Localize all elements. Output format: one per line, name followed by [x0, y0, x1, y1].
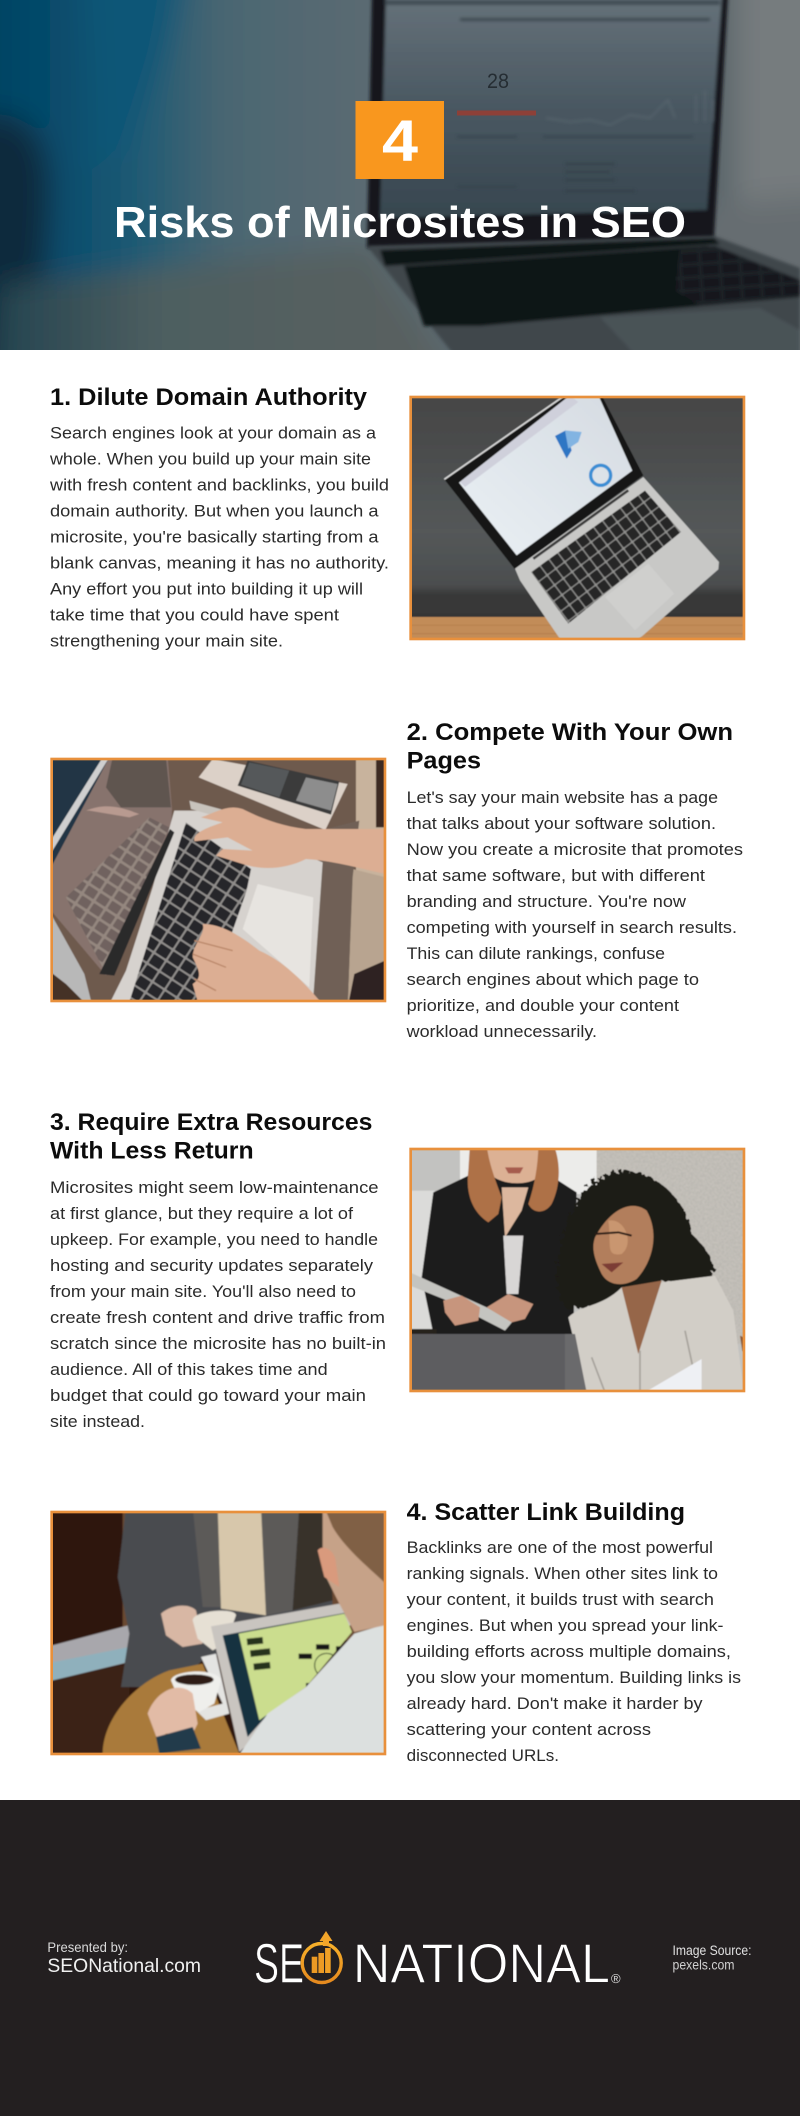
- image source: Image Source:: [672, 1943, 752, 1958]
- body text 1: blank canvas, meaning it has no authority.: [50, 553, 389, 572]
- body text 2: workload unnecessarily.: [406, 1022, 597, 1041]
- section 2: compete with your own pages: [44, 719, 743, 1041]
- logo: SEO National: NATIONAL: [353, 1932, 610, 1994]
- body text 1: Any effort you put into building it up will: [50, 579, 363, 598]
- body text 2: prioritize, and double your content: [407, 996, 679, 1015]
- title: Risks of Microsites in SEO: [114, 198, 686, 247]
- body text 2: Now you create a microsite that promotes: [407, 840, 743, 859]
- hero laptop lid and screen: [367, 0, 728, 248]
- body text 3: from your main site. You'll also need to: [50, 1282, 356, 1301]
- heading 4: 4. Scatter Link Building: [407, 1499, 685, 1526]
- footer band: [0, 1800, 800, 2116]
- body text 2: [406, 788, 743, 1041]
- presented by: SEONational.com: [47, 1955, 201, 1977]
- section 3: require extra resources: [50, 1109, 752, 1431]
- section 4: scatter link building: [46, 1499, 741, 1765]
- hero banner: [0, 0, 800, 350]
- body text 1: whole. When you build up your main site: [49, 449, 371, 468]
- body text 4: already hard. Don't make it harder by: [407, 1694, 703, 1713]
- hero laptop screen details: 28: [487, 70, 509, 93]
- body text 2: branding and structure. You're now: [407, 892, 687, 911]
- logo icon: orange ring with bars and arrow: [302, 1931, 341, 1982]
- heading 3: 3. Require Extra Resources: [50, 1109, 372, 1136]
- body text 3: scratch since the microsite has no built-in: [50, 1334, 386, 1353]
- presented by: [47, 1939, 201, 1977]
- body text 4: building efforts across multiple domains,: [407, 1642, 731, 1661]
- body text 4: your content, it builds trust with search: [407, 1590, 714, 1609]
- body text 2: search engines about which page to: [407, 970, 699, 989]
- body text 1: take time that you could have spent: [50, 605, 339, 624]
- logo: SEO National: SE: [254, 1932, 304, 1994]
- body text 4: Backlinks are one of the most powerful: [407, 1538, 713, 1557]
- presented by: Presented by:: [47, 1939, 128, 1955]
- number badge: 4: [382, 108, 418, 174]
- heading 3: With Less Return: [50, 1138, 254, 1164]
- photo: laptop on dark table: [405, 392, 752, 647]
- heading 2: [407, 719, 733, 774]
- body text 3: site instead.: [50, 1412, 145, 1431]
- heading 3: [50, 1109, 372, 1164]
- body text 4: ranking signals. When other sites link to: [407, 1564, 718, 1583]
- body text 3: budget that could go toward your main: [50, 1386, 366, 1405]
- body text 1: domain authority. But when you launch a: [50, 501, 379, 520]
- body text 4: disconnected URLs.: [407, 1746, 559, 1765]
- body text 1: [49, 423, 389, 650]
- photo: hands typing on laptop: [44, 754, 393, 1007]
- photo: two women at a laptop: [403, 1144, 752, 1397]
- body text 3: Microsites might seem low-maintenance: [50, 1178, 379, 1197]
- number badge: [356, 101, 444, 179]
- body text 1: strengthening your main site.: [50, 631, 283, 650]
- body text 2: competing with yourself in search results.: [407, 918, 737, 937]
- body text 4: you slow your momentum. Building links is: [407, 1668, 741, 1687]
- body text 2: This can dilute rankings, confuse: [407, 944, 665, 963]
- body text 3: [50, 1178, 386, 1431]
- image source: [672, 1943, 752, 1972]
- body text 3: create fresh content and drive traffic from: [50, 1308, 385, 1327]
- body text 2: Let's say your main website has a page: [407, 788, 718, 807]
- body text 2: that talks about your software solution.: [407, 814, 716, 833]
- body text 3: hosting and security updates separately: [50, 1256, 374, 1275]
- section 1: dilute domain authority: [49, 384, 752, 650]
- logo: SEO National: ®: [611, 1971, 621, 1986]
- body text 3: audience. All of this takes time and: [50, 1360, 328, 1379]
- body text 1: Search engines look at your domain as a: [50, 423, 377, 442]
- hero laptop screen details: [457, 74, 715, 122]
- body text 1: microsite, you're basically starting from a: [50, 527, 379, 546]
- body text 4: [407, 1538, 741, 1765]
- hero laptop base and keyboard: [367, 236, 800, 360]
- photo: coffee meeting with SEO strategy laptop: [46, 1507, 393, 1760]
- body text 4: engines. But when you spread your link-: [407, 1616, 724, 1635]
- body text 1: with fresh content and backlinks, you build: [49, 475, 389, 494]
- body text 4: scattering your content across: [407, 1720, 651, 1739]
- body text 2: that same software, but with different: [407, 866, 705, 885]
- heading 2: Pages: [407, 748, 481, 774]
- heading 1: 1. Dilute Domain Authority: [50, 384, 367, 411]
- body text 3: upkeep. For example, you need to handle: [50, 1230, 378, 1249]
- heading 2: 2. Compete With Your Own: [407, 719, 733, 746]
- hero photo: blurred laptop on desk: [0, 0, 800, 350]
- body text 3: at first glance, but they require a lot of: [50, 1204, 353, 1223]
- image source: pexels.com: [672, 1958, 734, 1972]
